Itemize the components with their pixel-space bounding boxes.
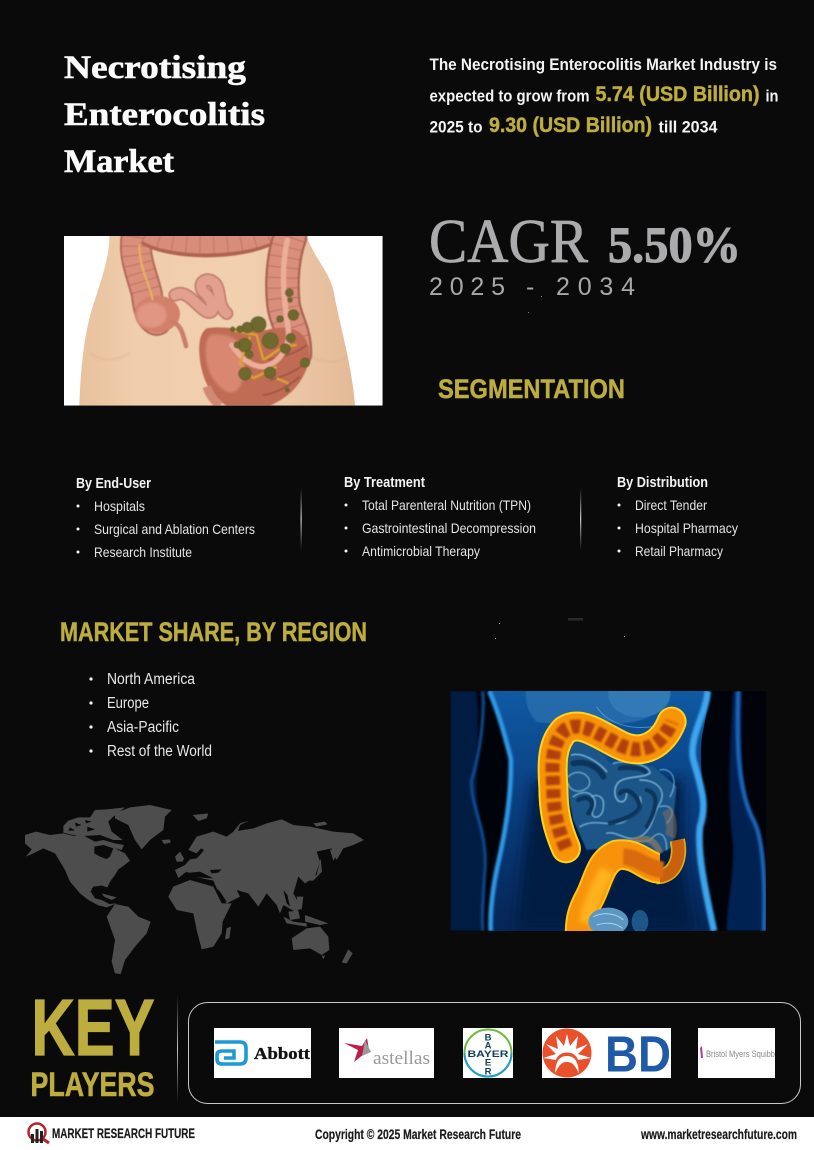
segment column: by treatment: Antimicrobial Therapy bbox=[362, 543, 480, 559]
torso bbox=[488, 691, 715, 931]
main colon ascending and transverse bbox=[553, 722, 672, 848]
CAGR callout bbox=[429, 208, 741, 313]
footer brand: MARKET RESEARCH FUTURE bbox=[52, 1126, 195, 1141]
market growth summary text: expected to grow from bbox=[430, 88, 590, 106]
image: lower abdomen colon with diverticula bbox=[64, 233, 383, 406]
bladder bbox=[588, 908, 628, 931]
market growth summary text: 5.74 (USD Billion) bbox=[596, 83, 760, 106]
CAGR callout: - bbox=[526, 273, 534, 301]
caecum bbox=[135, 296, 180, 332]
region list: Europe bbox=[107, 695, 149, 712]
region list: North America bbox=[107, 671, 195, 688]
segment column: by treatment bbox=[344, 474, 536, 559]
region list bbox=[89, 671, 212, 760]
segment column: by distribution: Direct Tender bbox=[635, 497, 707, 513]
panel: key player logos bbox=[188, 1002, 800, 1104]
transverse colon bbox=[147, 234, 270, 246]
logo: Bayer: R bbox=[485, 1066, 492, 1078]
segment column: by treatment: Gastrointestinal Decompression bbox=[362, 520, 536, 536]
appendix bbox=[173, 322, 186, 346]
logo: Bristol Myers Squibb: Bristol Myers Squibb bbox=[706, 1049, 775, 1060]
logo: BD: BD bbox=[605, 1026, 671, 1082]
diverticula polyps bbox=[230, 289, 310, 392]
inner pale band bbox=[232, 240, 289, 367]
logo: Bayer: B bbox=[485, 1032, 492, 1044]
segment column: by end-user bbox=[76, 475, 255, 560]
logo: Bristol Myers Squibb bbox=[698, 1028, 775, 1078]
title: Enterocolitis bbox=[64, 97, 265, 133]
logo: Bayer: BAYER bbox=[468, 1049, 509, 1060]
mesentery vessels bbox=[139, 245, 153, 300]
title: Market bbox=[64, 144, 174, 180]
title bbox=[64, 50, 265, 180]
yellow fat vessels bbox=[230, 330, 297, 383]
CAGR callout: 2034 bbox=[556, 273, 635, 301]
arm silhouettes bbox=[450, 691, 484, 931]
small intestine bbox=[567, 742, 677, 857]
divider bbox=[300, 488, 302, 550]
market growth summary text bbox=[430, 56, 778, 137]
descending colon lower bbox=[657, 840, 678, 877]
segment column: by treatment: Total Parenteral Nutrition (TPN) bbox=[362, 497, 531, 513]
sigmoid and rectum bbox=[580, 855, 660, 937]
sigmoid colon bbox=[199, 327, 310, 406]
market growth summary text: 9.30 (USD Billion) bbox=[489, 114, 652, 137]
logo: Abbott: Abbott bbox=[254, 1044, 310, 1063]
torso edge glow bbox=[489, 691, 511, 931]
segment column: by treatment: By Treatment bbox=[344, 474, 425, 491]
footer copyright: Copyright © 2025 Market Research Future bbox=[315, 1127, 521, 1142]
arctic islands bbox=[63, 807, 125, 840]
market growth summary text: The Necrotising Enterocolitis Market Industry is bbox=[430, 56, 777, 74]
region list: Asia-Pacific bbox=[107, 719, 179, 736]
world map bbox=[25, 805, 364, 974]
footer bar bbox=[0, 1117, 814, 1150]
segment column: by end-user: By End-User bbox=[76, 475, 151, 492]
image: glowing colon in transparent blue torso bbox=[450, 691, 766, 937]
torso skin bbox=[79, 236, 355, 406]
segment column: by end-user: Surgical and Ablation Centers bbox=[94, 521, 255, 537]
ileum loop bbox=[175, 280, 227, 313]
segment column: by distribution bbox=[617, 474, 738, 559]
inland seas bbox=[68, 820, 290, 907]
CAGR callout: CAGR bbox=[429, 208, 589, 276]
descending colon bbox=[282, 237, 295, 353]
segment column: by distribution: Retail Pharmacy bbox=[635, 543, 723, 559]
logo: Bayer bbox=[463, 1028, 513, 1078]
market growth summary text: in bbox=[766, 88, 778, 106]
CAGR callout: 2025 bbox=[429, 273, 505, 301]
segment column: by distribution: Hospital Pharmacy bbox=[635, 520, 738, 536]
heading: key players: PLAYERS bbox=[30, 1066, 154, 1104]
segment column: by end-user: Hospitals bbox=[94, 498, 145, 514]
logo: Bayer: A bbox=[485, 1040, 492, 1052]
ascending colon bbox=[136, 237, 157, 320]
stray specks bbox=[495, 618, 625, 639]
divider bbox=[580, 488, 581, 550]
logo: BD bbox=[542, 1026, 671, 1082]
region list: Rest of the World bbox=[107, 743, 212, 760]
logo: Abbott bbox=[214, 1028, 311, 1078]
footer logo icon bbox=[28, 1124, 49, 1143]
ribcage / stomach area bbox=[526, 691, 670, 723]
market growth summary text: 2025 to bbox=[430, 118, 482, 136]
logo: Bayer: E bbox=[485, 1058, 491, 1068]
market growth summary text: till 2034 bbox=[658, 118, 718, 136]
heading: key players: KEY bbox=[32, 983, 154, 1072]
heading: market share by region: MARKET SHARE, BY REGION bbox=[60, 617, 367, 647]
heading: key players bbox=[30, 983, 154, 1104]
segment column: by distribution: By Distribution bbox=[617, 474, 708, 491]
logo: astellas: astellas bbox=[373, 1048, 430, 1069]
segment column: by end-user: Research Institute bbox=[94, 544, 192, 560]
divider bbox=[177, 995, 178, 1103]
title: Necrotising bbox=[64, 50, 247, 86]
heading: segmentation: SEGMENTATION bbox=[438, 374, 625, 404]
logo: astellas bbox=[339, 1028, 434, 1078]
CAGR callout: 5.50% bbox=[608, 218, 741, 274]
